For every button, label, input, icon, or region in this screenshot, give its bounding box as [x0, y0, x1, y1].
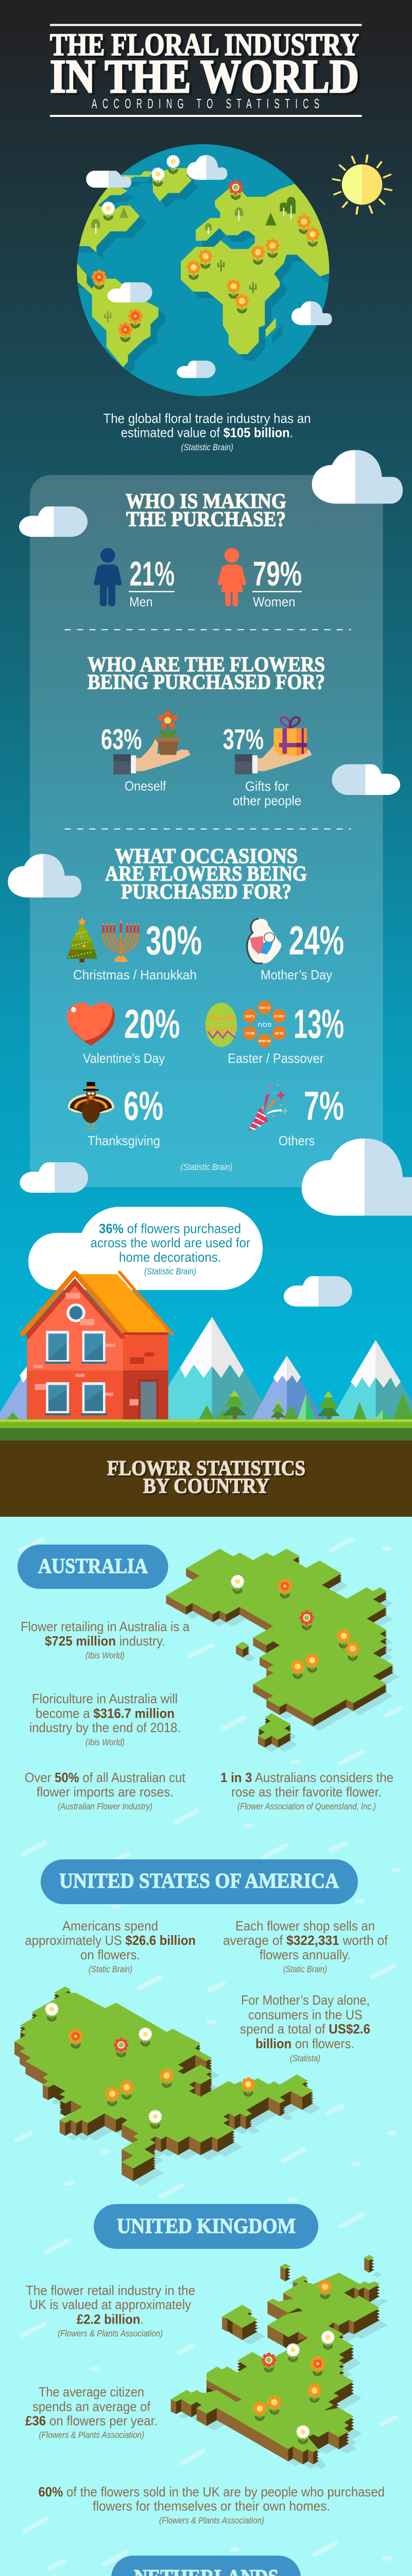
text: Australia floriculture	[29, 1691, 181, 1748]
heading: flower statistics by country: BY COUNTRY	[143, 1474, 269, 1498]
cloud	[284, 1276, 352, 1307]
text: Australia favorite	[220, 1770, 393, 1811]
text: Australia imports: flower imports are roses.	[37, 1784, 174, 1800]
text: Australia retail: $725 million industry.	[45, 1633, 165, 1649]
icon: man	[96, 548, 119, 606]
text: UK average citizen: (Flowers & Plants Association)	[39, 2430, 144, 2440]
stat: christmas and hanukkah 30%: Christmas / Hanukkah	[73, 967, 197, 982]
text: UK retail: £2.2 billion.	[77, 2311, 144, 2327]
stat: christmas and hanukkah 30%: 30%	[146, 917, 202, 963]
stat: mother's day 24%	[247, 917, 344, 982]
text: UK self purchase	[38, 2484, 385, 2526]
stat: men 21%: 21%	[130, 554, 175, 593]
icon: seder plate	[243, 1001, 286, 1048]
text: USA spend: approximately US $26.6 billion	[25, 1933, 196, 1948]
text: global value	[103, 411, 311, 452]
heading: who is making the purchase: WHO IS MAKING	[126, 489, 286, 513]
stat: thanksgiving 6%	[68, 1082, 163, 1148]
icon: easter egg	[205, 1003, 237, 1047]
stat: others 7%: Others	[279, 1133, 315, 1148]
icon: seder plate: חרוסת	[259, 1039, 271, 1043]
text: Australia floriculture: become a $316.7 million	[36, 1705, 175, 1721]
icon: heart	[67, 1003, 115, 1046]
text: global value: estimated value of $105 billion.	[121, 425, 293, 440]
cloud	[312, 450, 403, 504]
icon: mother and baby	[247, 919, 281, 963]
text: USA shop	[223, 1918, 388, 1974]
text: UK retail: UK is valued at approximately	[29, 2297, 191, 2312]
panel: purchase statistics	[30, 475, 383, 1187]
country pill: USA: UNITED STATES OF AMERICA	[59, 1869, 339, 1892]
icon: seder plate: חזרת	[274, 1014, 284, 1019]
callout: home decorations cloud: across the world are used for	[91, 1235, 250, 1250]
text: USA shop: (Static Brain)	[283, 1964, 327, 1974]
text: Australia floriculture: (Ibis World)	[85, 1737, 125, 1748]
cloud	[187, 155, 227, 180]
icon: menorah	[102, 920, 139, 962]
heading: who are the flowers being purchased for: BEING PURCHASED FOR?	[88, 670, 325, 693]
text: Australia imports: (Australian Flower Industry)	[58, 1801, 152, 1811]
cloud	[302, 1139, 412, 1216]
text: UK average citizen: The average citizen	[39, 2384, 144, 2400]
text: USA Mother's Day: spend a total of US$2.6	[240, 2021, 370, 2037]
country pill: Netherlands	[111, 2555, 301, 2576]
heading: what occasions	[105, 844, 307, 903]
stat: gifts 37%	[223, 717, 312, 808]
stat: women 79%	[252, 554, 302, 609]
text: global value: The global floral trade industry has an	[103, 411, 311, 426]
text: USA spend: on flowers.	[80, 1947, 140, 1962]
text: UK self purchase: (Flowers & Plants Association)	[159, 2515, 264, 2526]
country pill: Australia: AUSTRALIA	[38, 1554, 148, 1578]
icon: seder plate: ביצה	[245, 1014, 254, 1019]
stat: christmas and hanukkah 30%	[67, 917, 202, 982]
map: United Kingdom	[171, 2255, 388, 2469]
heading: flower statistics by country	[107, 1456, 305, 1498]
stat: valentine's day 20%	[67, 1001, 180, 1066]
stat: gifts 37%: Gifts for	[245, 778, 289, 794]
text: USA spend: (Static Brain)	[89, 1964, 132, 1974]
text: Australia floriculture: Floriculture in Australia will	[32, 1691, 178, 1706]
icon: sun	[333, 155, 391, 214]
stat: easter and passover 13%	[205, 1001, 344, 1066]
heading: what occasions: WHAT OCCASIONS	[115, 844, 298, 868]
icon: seder plate: פסח	[258, 1021, 271, 1029]
text: UK self purchase: 60% of the flowers sold in the UK are by people who purchased	[38, 2484, 385, 2500]
text: Australia retail: (Ibis World)	[85, 1650, 125, 1660]
country pill: United Kingdom	[94, 2204, 318, 2249]
icon: seder plate: כרפס	[260, 1006, 270, 1010]
text: UK average citizen: spends an average of	[32, 2399, 151, 2414]
cloud	[19, 506, 88, 537]
text: Australia imports: Over 50% of all Australian cut	[25, 1770, 186, 1785]
stat: easter and passover 13%: 13%	[294, 1001, 344, 1047]
stat: valentine's day 20%: Valentine’s Day	[83, 1050, 165, 1066]
stat: thanksgiving 6%: Thanksgiving	[88, 1133, 160, 1148]
cloud	[86, 171, 131, 188]
stat: women 79%: 79%	[253, 554, 302, 593]
text: USA Mother's Day: For Mother’s Day alone,	[241, 1992, 370, 2008]
text: USA spend: Americans spend	[62, 1918, 158, 1934]
stat: others 7%: 7%	[304, 1083, 344, 1129]
country pill: USA	[41, 1859, 358, 1904]
text: UK retail: (Flowers & Plants Association)	[58, 2328, 163, 2338]
country pill: Australia	[18, 1545, 168, 1589]
country pill: United Kingdom: UNITED KINGDOM	[117, 2214, 296, 2238]
text: USA shop: flowers annually.	[260, 1947, 351, 1962]
house	[22, 1272, 172, 1419]
title: ACCORDING TO STATISTICS	[92, 96, 319, 111]
heading: who are the flowers being purchased for	[88, 652, 325, 693]
text: USA shop: Each flower shop sells an	[235, 1918, 375, 1934]
text: Australia favorite: 1 in 3 Australians considers the	[220, 1770, 393, 1785]
cloud	[8, 854, 81, 897]
heading: who is making the purchase: THE PURCHASE?	[126, 507, 286, 531]
icon: party popper	[248, 1082, 288, 1131]
stat: easter and passover 13%: Easter / Passover	[228, 1050, 324, 1066]
heading: flower statistics by country: FLOWER STATISTICS	[107, 1456, 305, 1480]
icon: turkey	[68, 1082, 114, 1128]
text: USA Mother's Day	[240, 1992, 370, 2063]
text: USA Mother's Day: billion on flowers.	[255, 2036, 354, 2052]
cloud	[332, 764, 400, 795]
stat: oneself 63%	[101, 710, 191, 794]
globe illustration	[77, 144, 330, 396]
callout: home decorations cloud: home decorations.	[119, 1249, 221, 1265]
stat: men 21%	[129, 554, 175, 609]
heading: what occasions: ARE FLOWERS BEING	[105, 861, 307, 885]
stat: mother's day 24%: 24%	[289, 917, 344, 963]
cloud	[108, 282, 152, 302]
callout: home decorations cloud	[28, 1207, 263, 1290]
icon: seder plate: מרור	[245, 1031, 254, 1036]
text: UK self purchase: flowers for themselves or their own homes.	[93, 2498, 330, 2514]
text: USA shop: average of $322,331 worth of	[223, 1933, 388, 1948]
icon: christmas tree	[67, 918, 97, 962]
heading: what occasions: PURCHASED FOR?	[121, 879, 291, 903]
stat: others 7%	[248, 1082, 344, 1148]
stat: valentine's day 20%: 20%	[124, 1001, 180, 1047]
stat: men 21%: Men	[129, 594, 152, 609]
title: IN THE WORLD	[50, 50, 359, 103]
stat: thanksgiving 6%: 6%	[124, 1083, 163, 1129]
text: Australia favorite: (Flower Association of Queensland, Inc.)	[237, 1801, 376, 1811]
icon: hand holding gift	[235, 717, 312, 774]
heading: who are the flowers being purchased for: WHO ARE THE FLOWERS	[88, 652, 325, 676]
text: Australia retail: Flower retailing in Australia is a	[21, 1619, 190, 1634]
icon: hand holding potted flower	[113, 710, 191, 774]
source: (Statistic Brain)	[180, 1162, 233, 1172]
text: UK retail: The flower retail industry in the	[26, 2282, 195, 2298]
stat: gifts 37%: 37%	[223, 723, 264, 755]
text: USA Mother's Day: consumers in the US	[248, 2007, 363, 2023]
map: USA	[14, 1987, 321, 2186]
cloud	[20, 1162, 88, 1193]
text: global value: (Statistic Brain)	[181, 442, 233, 452]
heading: who is making the purchase	[126, 489, 286, 531]
text: USA spend	[25, 1918, 196, 1974]
stat: oneself 63%: Oneself	[125, 778, 166, 794]
ground	[0, 1419, 412, 1517]
callout: home decorations cloud: (Statistic Brain)	[144, 1266, 196, 1277]
icon: woman	[220, 548, 244, 606]
text: Australia floriculture: industry by the end of 2018.	[29, 1720, 181, 1735]
map: Australia	[166, 1549, 400, 1752]
stat: oneself 63%: 63%	[101, 723, 142, 755]
icon: seder plate: זרוע	[275, 1031, 283, 1036]
text: Australia imports	[25, 1770, 186, 1811]
title	[50, 24, 362, 117]
mountains and trees	[0, 1317, 412, 1419]
text: UK retail	[26, 2282, 195, 2338]
callout: home decorations cloud: 36% of flowers purchased	[99, 1221, 241, 1236]
text: UK average citizen	[25, 2384, 158, 2440]
stat: mother's day 24%: Mother’s Day	[261, 967, 332, 982]
stat: women 79%: Women	[253, 594, 296, 609]
text: USA Mother's Day: (Statista)	[290, 2053, 320, 2063]
cloud	[177, 361, 215, 378]
text: Australia retail	[21, 1619, 190, 1660]
text: Australia favorite: rose as their favorite flower.	[231, 1784, 382, 1800]
cloud	[291, 301, 332, 325]
text: UK average citizen: £36 on flowers per year.	[25, 2413, 158, 2429]
stat: gifts 37%: other people	[233, 793, 301, 808]
